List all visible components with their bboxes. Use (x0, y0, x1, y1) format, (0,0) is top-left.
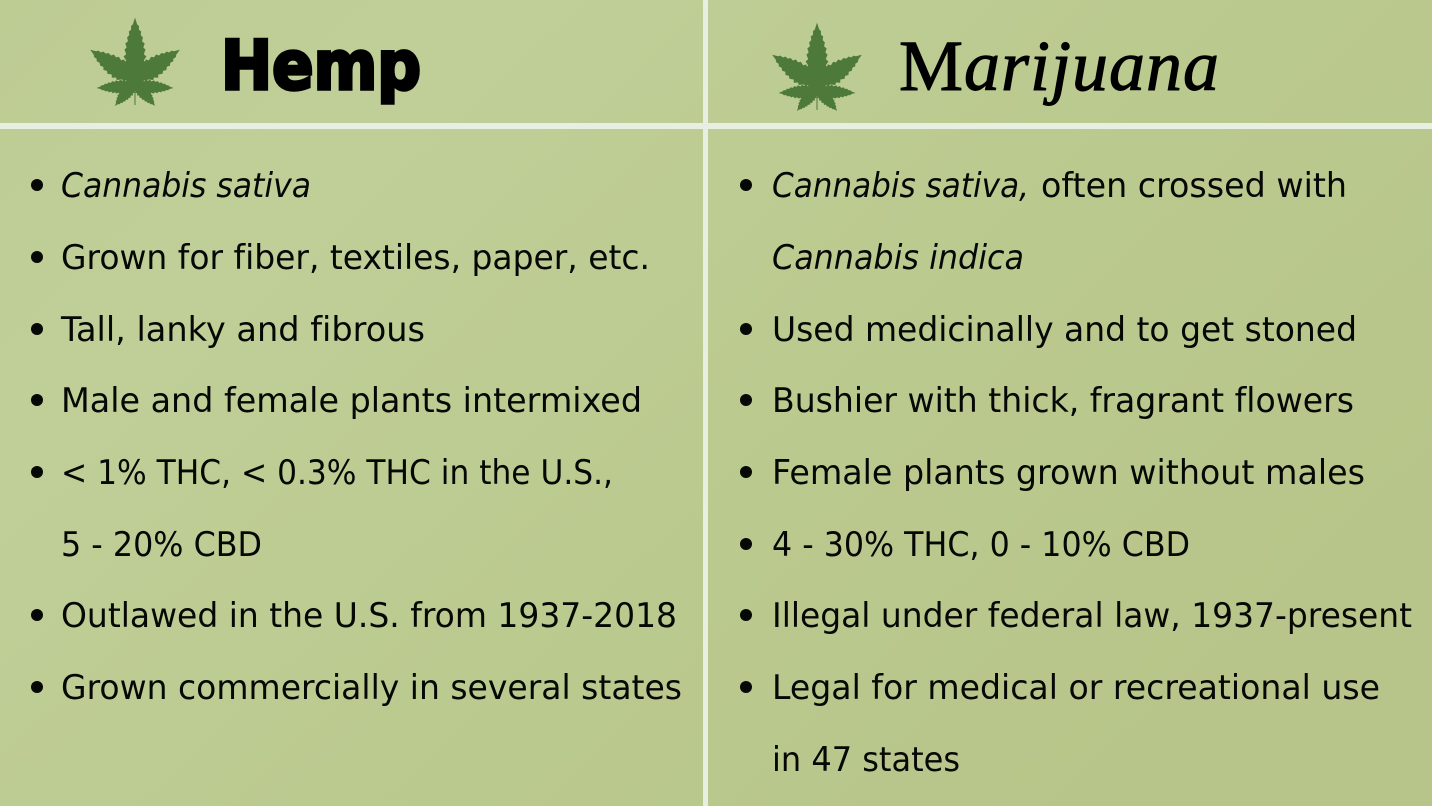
list: marijuana facts: Used medicinally and to get stoned (772, 310, 1357, 350)
list: marijuana facts: 4 - 30% THC, 0 - 10% CBD (772, 525, 1190, 565)
list: hemp facts: Tall, lanky and fibrous (60, 310, 425, 350)
list: hemp facts: Outlawed in the U.S. from 1937-2018 (61, 596, 677, 636)
list: hemp facts: 5 - 20% CBD (61, 525, 262, 565)
list: hemp facts: Grown commercially in several states (61, 668, 682, 708)
icon: hemp cannabis leaf (84, 18, 186, 110)
list: marijuana facts: in 47 states (772, 740, 960, 780)
list: hemp facts: Male and female plants intermixed (61, 381, 642, 421)
list: marijuana facts: Female plants grown without males (772, 453, 1365, 493)
list: marijuana facts: Illegal under federal law, 1937-present (772, 596, 1412, 636)
list: marijuana facts: Bushier with thick, fragrant flowers (772, 381, 1354, 421)
panel: hemp (31, 18, 682, 708)
list: marijuana facts (740, 166, 1412, 780)
list: hemp facts: Grown for fiber, textiles, paper, etc. (61, 238, 650, 278)
list: marijuana facts: Cannabis indica (772, 238, 1024, 278)
heading: Marijuana: Marijuana (899, 26, 1219, 106)
panel: marijuana (740, 23, 1412, 780)
list: hemp facts (31, 166, 682, 708)
list: marijuana facts: Legal for medical or recreational use (772, 668, 1380, 708)
icon: marijuana cannabis leaf (766, 23, 868, 115)
heading: Hemp: Hemp (221, 27, 421, 106)
list: hemp facts: Cannabis sativa (61, 166, 311, 206)
list: marijuana facts: Cannabis sativa, (772, 166, 1029, 206)
list: marijuana facts: often crossed with (1041, 166, 1347, 206)
list: hemp facts: < 1% THC, < 0.3% THC in the U.S., (61, 453, 613, 493)
